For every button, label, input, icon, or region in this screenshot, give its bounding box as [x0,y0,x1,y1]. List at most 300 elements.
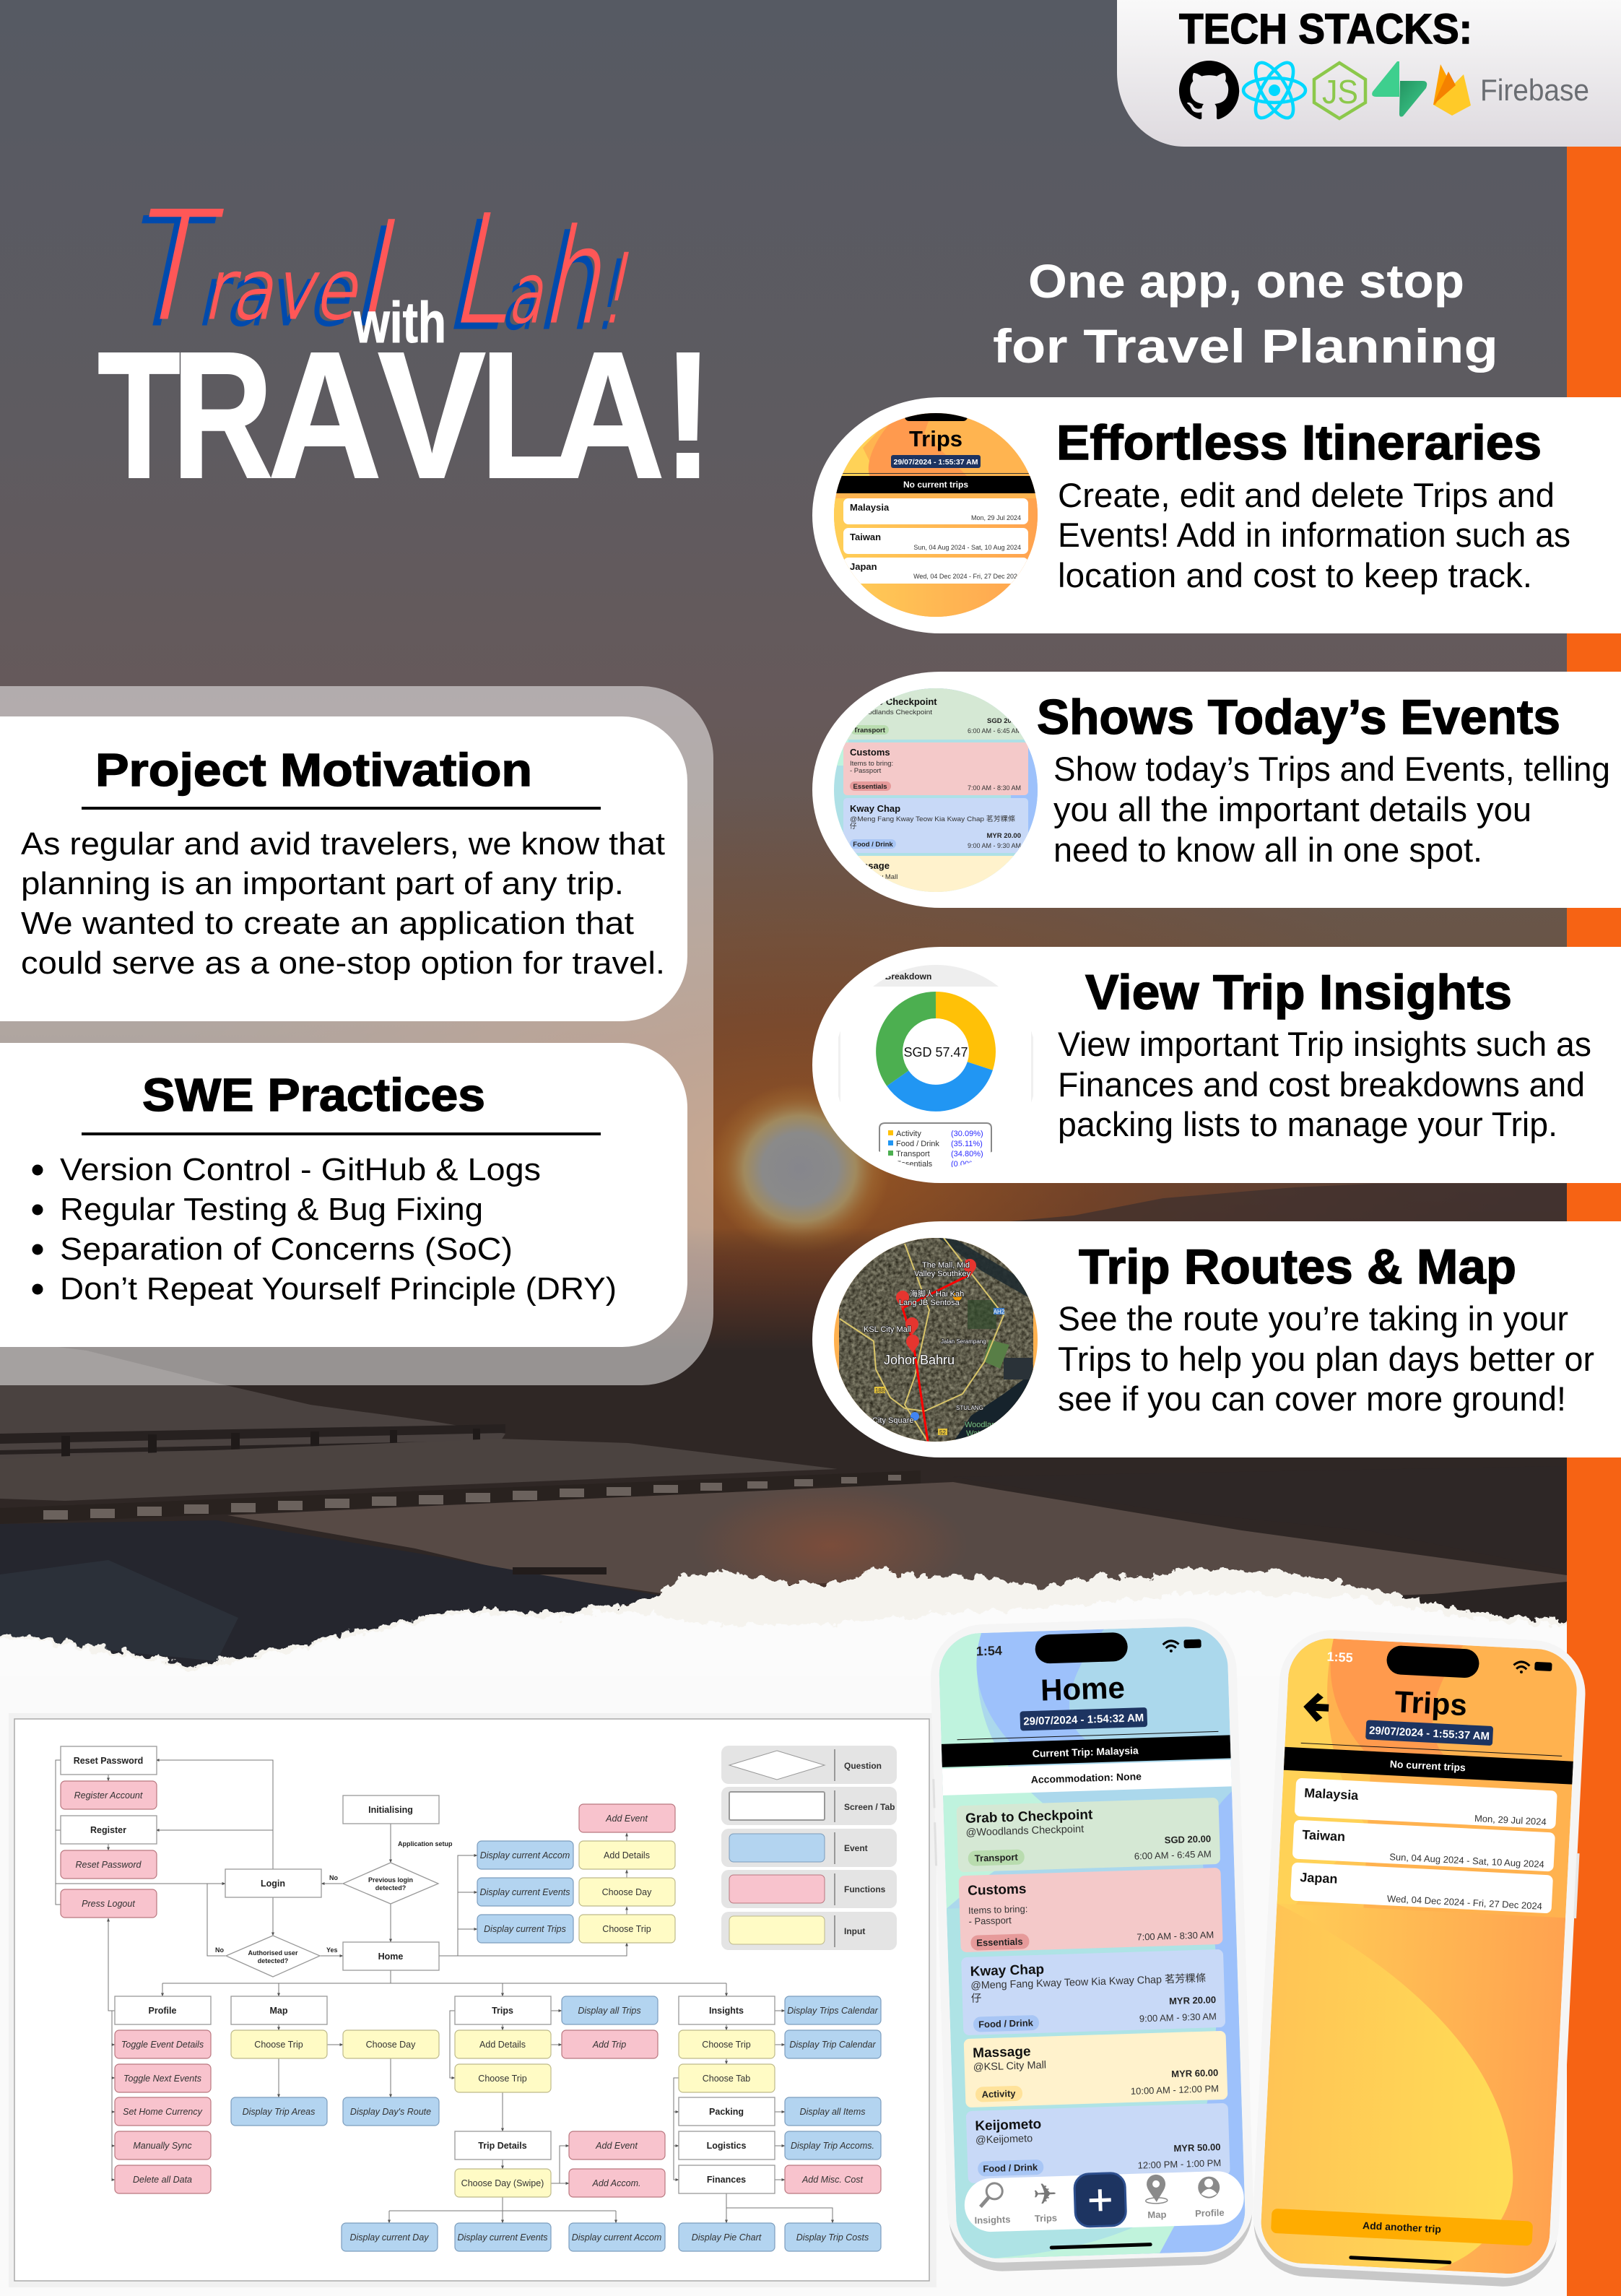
node: display trip calendar: Display Trip Calendar [789,2040,876,2050]
node: display all items: Display all Items [800,2107,865,2117]
accommodation band [942,1759,1232,1795]
text: events body: Show today’s Trips and Events, telling [1053,750,1610,788]
no trips band: No current trips [1390,1758,1466,1773]
screenshot: trips screen: 29/07/2024 - 1:55:37 AM [894,458,978,467]
node: toggle event details [115,2030,211,2058]
node: display pie chart [679,2223,775,2251]
label: no: No [329,1874,338,1881]
node: previous login: Previous login [368,1876,413,1884]
icon: profile [1198,2176,1220,2198]
node: logistics [679,2131,775,2159]
node: map [231,1996,327,2024]
date badge: 29/07/2024 - 1:55:37 AM [1369,1725,1490,1743]
date badge [1020,1707,1147,1730]
node: display trip areas: Display Trip Areas [243,2107,315,2117]
node: display current trips: Display current Trips [484,1924,566,1934]
screenshot: satellite map: 52 [939,1429,946,1436]
node: home [343,1942,439,1970]
title: TRAVLA!: R [172,314,273,516]
legend: cost breakdown [879,1123,991,1169]
event card: grab to checkpoint: Transport [975,1852,1019,1864]
node: map choose trip: Choose Trip [254,2040,303,2050]
node: profile [115,1996,211,2024]
icon: react [1243,57,1305,124]
node: login: Login [261,1879,285,1889]
node: display current events [477,1878,573,1906]
screenshot: trips screen: Wed, 04 Dec 2024 - Fri, 27 Dec 2024 [913,573,1021,580]
heading: trips: Trips [1394,1684,1468,1722]
screenshot: home events: 仔 [850,822,857,831]
map labels: KSL City Mall [864,1325,911,1334]
node: display trip accoms: Display Trip Accoms. [791,2141,874,2151]
title: TRAVLA!: A [551,314,665,516]
label: no auth: No [215,1946,224,1954]
legend: flowchart key [721,1746,897,1950]
node: add details: Add Details [604,1850,650,1860]
screenshot: trips screen: Sun, 04 Aug 2024 - Sat, 10 Aug 2024 [913,544,1021,551]
event card: keijometo [966,2103,1230,2183]
node: register account: Register Account [74,1790,143,1801]
heading: project motivation: Project Motivation [95,744,532,796]
accommodation band: Accommodation: None [1031,1770,1142,1785]
title: TRAVLA!: L [480,314,570,516]
node: choose day swipe: Choose Day (Swipe) [461,2178,544,2188]
panel: project motivation [0,716,687,1021]
legend: cost breakdown: (30.09%) [951,1130,983,1138]
bottom navigation [964,2169,1245,2232]
screenshot: satellite map [834,1238,1038,1442]
node: display all trips [562,1996,658,2024]
node: map choose day [343,2030,439,2058]
node: display trip areas [231,2097,327,2126]
screenshot: trips screen: Trips [909,426,962,451]
screenshot: home events: @Woodlands Checkpoint [850,709,932,716]
node: add trip: Add Trip [592,2040,626,2050]
node: profile: Profile [149,2006,176,2016]
event card: kway chap: 仔 [971,1992,982,2005]
screenshot: finance donut: SGD 57.47 [903,1045,968,1060]
node: toggle next events: Toggle Next Events [123,2074,201,2084]
node: add misc cost: Add Misc. Cost [801,2175,864,2185]
icon: insights [980,2183,1003,2207]
screenshot: home events: @Meng Fang Kway Teow Kia Kway Chap 茗芳粿條 [850,815,1016,823]
node: display trip costs [785,2223,881,2251]
node: display day's route [343,2097,439,2126]
screenshot: home events: Essentials [853,783,887,791]
phone: trips screen [1250,1627,1590,2289]
node: login [225,1869,321,1897]
icon: trips plane: ✈ [1033,2178,1058,2211]
event card: customs: Items to bring: [968,1903,1028,1916]
node: trips choose trip [455,2064,551,2092]
icon: supabase [1372,61,1427,117]
screenshot: trips screen: Taiwan [850,532,881,542]
node: display current accom [477,1841,573,1869]
node: delete all data: Delete all Data [133,2175,192,2185]
legend: flowchart key: Screen / Tab [844,1802,895,1812]
screenshot: home events: Grab to Checkpoint [850,696,937,707]
bottom navigation: Trips [1035,2212,1057,2224]
heading: tech stacks: TECH STACKS: [1179,6,1472,53]
node: home: Home [378,1951,403,1962]
map labels [864,1261,1004,1438]
node: trips: Trips [492,2006,513,2016]
text: routes body: See the route you’re taking in your [1058,1299,1568,1338]
add button [1074,2172,1126,2227]
chart: donut [890,1005,982,1098]
torn paper lower section [0,1566,1589,2296]
event card: customs: 7:00 AM - 8:30 AM [1137,1929,1214,1943]
event card: kway chap: Kway Chap [970,1962,1044,1980]
node: finances: Finances [707,2175,746,2185]
node: display current day: Display current Day [349,2232,429,2243]
legend: flowchart key: Question [844,1761,882,1771]
node: details add event [569,2131,665,2159]
node: register: Register [90,1825,126,1835]
add trip button: Add another trip [1363,2219,1441,2235]
heading: swe practices: SWE Practices [142,1069,485,1121]
event card: kway chap: MYR 20.00 [1169,1994,1216,2006]
panel: shows today's events [812,672,1621,908]
node: display pie chart: Display Pie Chart [692,2232,762,2243]
trip card: japan: Japan [1300,1870,1338,1886]
route line [903,1275,970,1442]
event card: customs: - Passport [968,1915,1012,1927]
icon: node js: JS [1322,73,1358,111]
event card: kway chap: 9:00 AM - 9:30 AM [1139,2011,1217,2024]
node: reset password: Reset Password [74,1756,143,1766]
node: trips [455,1996,551,2024]
node: display trip accoms [785,2131,881,2159]
node: insights: Insights [709,2006,744,2016]
node: display trips calendar [785,1996,881,2024]
text: events body [1053,750,1610,869]
panel: trip routes and map [812,1221,1621,1457]
screenshot: home events [834,686,1038,896]
node: add details [579,1841,675,1869]
event card: customs [959,1868,1223,1952]
event card: kway chap: @Meng Fang Kway Teow Kia Kway Chap 茗芳粿條 [970,1972,1206,1992]
screenshot: finance donut: . Breakdown [880,971,931,982]
node: register account [61,1781,157,1809]
node: initialising: Initialising [368,1805,413,1815]
event card: massage [964,2031,1227,2107]
node: add event: Add Event [605,1814,648,1824]
screenshot: trips screen: Mon, 29 Jul 2024 [971,514,1021,521]
node: authorised user: Authorised user [248,1949,298,1957]
node: register [61,1816,157,1844]
node: choose day [579,1878,675,1906]
phone screen [938,1625,1246,2260]
map labels: Woodlands [965,1421,1004,1429]
text: routes body [1058,1299,1594,1418]
text: itineraries body: Events! Add in information such as [1058,516,1570,554]
node: toggle event details: Toggle Event Details [121,2040,204,2050]
node: previous login: detected? [375,1884,406,1892]
screenshot: home events: Food / Drink [853,841,893,849]
orange side strip [1567,147,1621,2296]
node: press logout [61,1889,157,1918]
list: practices [32,1152,617,1307]
map labels: STULANG [956,1405,983,1411]
screenshot: home events: 6:00 AM - 6:45 AM [968,727,1021,735]
screenshot: home events: Massage [850,860,890,871]
node: authorised user: detected? [258,1957,288,1964]
node: choose tab: Choose Tab [703,2074,750,2084]
title: TRAVLA!: V [378,314,486,516]
text: motivation body: planning is an important part of any trip. [21,866,624,901]
status bar: 1:54 [975,1643,1002,1658]
event card: customs: Customs [968,1881,1027,1899]
event card: massage: MYR 60.00 [1171,2067,1218,2079]
legend: cost breakdown: (34.80%) [951,1150,983,1158]
event card: grab to checkpoint: @Woodlands Checkpoint [965,1824,1084,1839]
node: manually sync: Manually Sync [133,2141,192,2151]
text: routes body: Trips to help you plan days better or [1058,1340,1594,1378]
text: routes body: see if you can cover more ground! [1058,1379,1566,1418]
text: motivation body: We wanted to create an application that [21,906,634,941]
script title: Travel Lah!: Lah! [435,191,647,363]
trip card: malaysia: Mon, 29 Jul 2024 [1474,1813,1547,1827]
heading: view trip insights: View Trip Insights [1085,965,1512,1020]
node: logistics: Logistics [707,2141,746,2151]
node: reset password [61,1746,157,1775]
no trips band [1284,1747,1573,1785]
screenshot: satellite map: AH2 [994,1309,1005,1315]
node: press logout: Press Logout [82,1899,135,1909]
map labels: The Mall, Mid [922,1261,970,1270]
list: practices: Version Control - GitHub & Logs [60,1152,541,1187]
map labels: Johor Bahru [884,1353,955,1367]
text: motivation body: could serve as a one-stop option for travel. [21,945,665,981]
screenshot: home events: Customs [850,747,890,758]
trip card: taiwan: Sun, 04 Aug 2024 - Sat, 10 Aug 2024 [1389,1851,1544,1870]
trip card: japan: Wed, 04 Dec 2024 - Fri, 27 Dec 2024 [1387,1893,1542,1912]
title: TRAVLA!: T [97,314,181,516]
node: add trip [562,2030,658,2058]
node: display current events lower [455,2223,551,2251]
event card: keijometo: Keijometo [975,2117,1042,2134]
panel: tech stacks [1117,0,1621,147]
node: display current accom lower [569,2223,665,2251]
label: firebase: Firebase [1480,73,1589,107]
legend: flowchart key: Event [844,1843,868,1853]
trip card: malaysia: Malaysia [1304,1785,1360,1803]
title: TRAVLA!: A [268,314,382,516]
status bar [1326,1642,1552,1682]
node: trip details [455,2131,551,2159]
status bar [976,1632,1201,1664]
event card: massage: 10:00 AM - 12:00 PM [1131,2083,1219,2097]
node: insights choose trip [679,2030,775,2058]
node: initialising [343,1795,439,1824]
node: insights choose trip: Choose Trip [702,2040,751,2050]
trip card: malaysia [1295,1778,1557,1829]
node: map: Map [270,2006,288,2016]
panel: translucent backing [0,686,713,1385]
icon: back arrow [1303,1692,1329,1723]
node: trips choose trip: Choose Trip [478,2074,527,2084]
text: events body: you all the important details you [1053,790,1531,828]
screenshot: home events: Items to bring: [850,760,893,768]
screenshot: trips screen [834,412,1038,618]
node: add misc cost [785,2165,881,2193]
roads [840,1238,1004,1442]
label: application setup: Application setup [398,1840,453,1847]
map pins [896,1259,976,1353]
node: set home currency [115,2097,211,2126]
text: itineraries body [1058,476,1570,594]
add trip button [1271,2209,1533,2246]
map labels: Waterfront [966,1429,1003,1438]
date badge: 29/07/2024 - 1:54:32 AM [1023,1712,1144,1728]
heading: effortless itineraries: Effortless Itineraries [1056,415,1542,470]
node: add accom: Add Accom. [592,2178,640,2188]
list: practices: Separation of Concerns (SoC) [60,1231,513,1267]
legend: cost breakdown: (0.00%) [951,1160,979,1169]
node: display current trips [477,1915,573,1943]
screenshot: home events: - Passport [850,767,882,775]
bottom navigation: Insights [974,2214,1011,2226]
node: choose day swipe [455,2169,551,2197]
event card: keijometo: MYR 50.00 [1173,2141,1221,2154]
node: add accom [569,2169,665,2197]
legend: cost breakdown: (35.11%) [951,1140,983,1148]
node: trip details: Trip Details [478,2141,527,2151]
event card: massage: Massage [973,2044,1031,2061]
event card: kway chap: Food / Drink [978,2017,1034,2030]
text: itineraries body: Create, edit and delete Trips and [1058,476,1555,514]
bottom navigation: Profile [1195,2207,1225,2219]
current trip band [942,1735,1231,1767]
map labels: 海脚人 Hai Kah [910,1288,964,1299]
event card: grab to checkpoint [956,1798,1220,1872]
node: display all items [785,2097,881,2126]
node: choose trip: Choose Trip [602,1924,651,1934]
node: set home currency: Set Home Currency [123,2107,203,2117]
node: display current accom: Display current Accom [480,1850,570,1860]
node: display trips calendar: Display Trips Calendar [787,2006,879,2016]
node: packing [679,2097,775,2126]
status bar: 1:55 [1326,1650,1353,1665]
text: insights body [1058,1025,1591,1143]
chart: app flowchart [9,1713,936,2287]
panel: swe practices [0,1043,687,1347]
title: TRAVLA!: ! [663,314,713,516]
trip card: japan [1290,1863,1553,1913]
node: delete all data [115,2165,211,2193]
text: itineraries body: location and cost to keep track. [1058,556,1532,594]
node: insights [679,1996,775,2024]
legend: cost breakdown: Transport [896,1150,930,1158]
script title: Travel Lah! [111,181,654,363]
legend: flowchart key: Functions [844,1884,886,1894]
node: reset password function: Reset Password [75,1860,142,1870]
node: choose trip [579,1915,675,1943]
event card: grab to checkpoint: Grab to Checkpoint [965,1807,1093,1827]
node: display trip calendar [785,2030,881,2058]
node: display current day [342,2223,438,2251]
event card: grab to checkpoint: 6:00 AM - 6:45 AM [1134,1848,1212,1862]
heading: home: Home [1040,1671,1126,1707]
flowchart connectors [56,1760,833,2223]
text: insights body: Finances and cost breakdowns and [1058,1065,1585,1104]
node: display day's route: Display Day's Route [350,2107,431,2117]
node: display current events: Display current Events [479,1887,570,1897]
node: manually sync [115,2131,211,2159]
event card: customs: Essentials [976,1936,1023,1949]
node: choose day: Choose Day [602,1887,652,1897]
node: map choose trip [231,2030,327,2058]
node: trips add details [455,2030,551,2058]
text: insights body: View important Trip insights such as [1058,1025,1591,1063]
screenshot: home events: Transport [853,727,886,735]
node: toggle next events [115,2064,211,2092]
screenshot: home events: Kway Chap [850,803,900,814]
event card: keijometo: @Keijometo [975,2133,1033,2146]
heading: shows today's events: Shows Today’s Events [1037,690,1560,745]
panel: effortless itineraries [812,397,1621,633]
legend: cost breakdown: Food / Drink [896,1140,939,1148]
screenshot: trips screen: No current trips [903,480,968,490]
script title: Travel Lah!: Travel [118,181,415,353]
node: display trip costs: Display Trip Costs [796,2232,869,2243]
node: packing: Packing [709,2107,744,2117]
trip card: taiwan [1292,1820,1555,1872]
screenshot: home events: @KSL City Mall [850,873,898,881]
text: motivation body: As regular and avid travelers, we know that [21,826,665,862]
event card: kway chap [961,1949,1225,2035]
screenshot: trips screen: Japan [850,561,877,572]
screenshot: satellite map: 188 [875,1387,885,1394]
screenshot: home events: 9:00 AM - 9:30 AM [968,842,1021,849]
tagline [993,254,1498,373]
phone: home screen [928,1616,1256,2273]
trip card: taiwan: Taiwan [1302,1827,1345,1844]
title: with: with [353,290,446,355]
bottom navigation: Map [1147,2209,1167,2220]
screenshot: home events: SGD 20.00 [987,717,1021,725]
node: map choose day: Choose Day [366,2040,416,2050]
event card: keijometo: Food / Drink [983,2162,1038,2174]
map labels: Lang JB Sentosa [899,1299,960,1307]
event card: keijometo: 12:00 PM - 1:00 PM [1137,2157,1221,2171]
phone screen [1259,1637,1579,2276]
node: trips add details: Add Details [479,2040,526,2050]
event card: grab to checkpoint: SGD 20.00 [1165,1833,1211,1845]
script title: Travel Lah!: Lah! [442,185,654,357]
node: add event [579,1804,675,1832]
legend: flowchart key: Input [844,1926,865,1936]
date badge [1365,1720,1493,1746]
heading: trip routes and map: Trip Routes & Map [1079,1239,1516,1294]
screenshot: trips screen: Malaysia [850,502,890,513]
screenshot: home events: 7:00 AM - 8:30 AM [968,784,1021,792]
screenshot: home events: MYR 20.00 [986,832,1021,840]
node: authorised user [226,1936,320,1977]
script title: Travel Lah!: Travel [111,188,408,360]
text: motivation body [21,826,665,981]
node: details add event: Add Event [595,2141,638,2151]
tagline: for Travel Planning [993,319,1498,373]
map labels: Valley Southkey [914,1270,971,1278]
event card: massage: @KSL City Mall [973,2060,1046,2074]
label: yes: Yes [326,1946,338,1954]
legend: cost breakdown: Activity [896,1130,921,1138]
map labels: Jalan Serampang [941,1338,986,1345]
icon: github [1179,61,1239,119]
node: finances [679,2165,775,2193]
